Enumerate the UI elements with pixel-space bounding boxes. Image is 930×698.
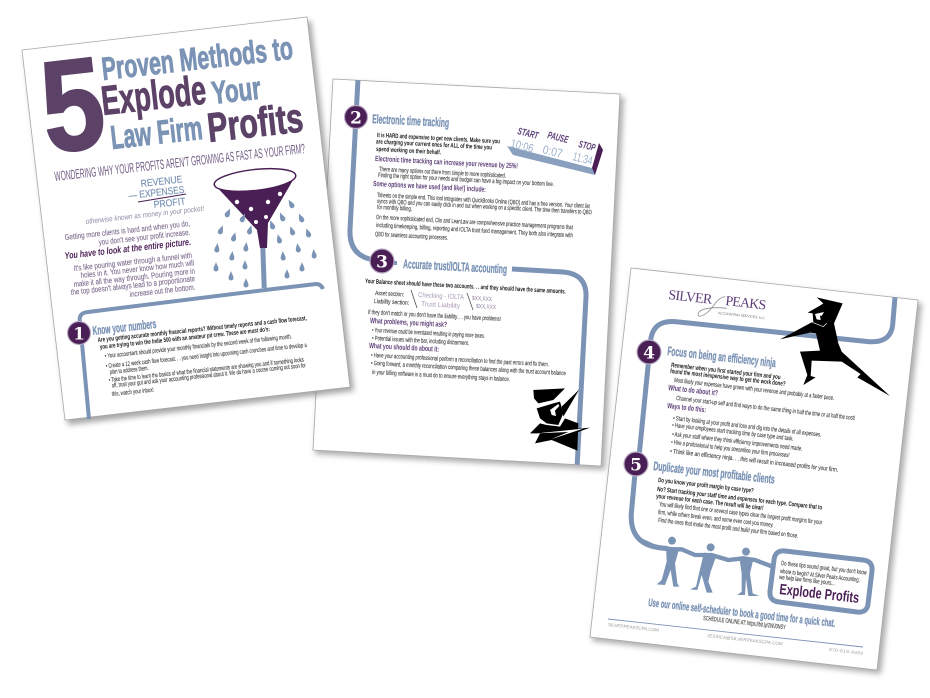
text block: intro: the top doesn't always lead to a proportionate xyxy=(70,274,196,297)
text block: duplicate clients: No? Start tracking your staff time and expenses for each type. Compare that to xyxy=(657,486,823,511)
logo: Silver Peaks: SILVER xyxy=(668,288,714,308)
callout: explode profits box: we help law firms like yours... xyxy=(778,574,835,587)
text block: efficiency: Ways to do this: xyxy=(667,401,707,414)
text block: efficiency: • Ask your staff where they think efficiency improvements need made. xyxy=(672,431,803,453)
text block: trust accounting: What problems, you might ask? xyxy=(370,316,448,329)
callout: explode profits box xyxy=(770,551,872,612)
timer graphic: START xyxy=(516,126,540,142)
heading: duplicate clients: Duplicate your most profitable clients xyxy=(653,459,775,487)
connector dash xyxy=(392,261,397,265)
page 1: cover with title and funnel: WONDERING WHY YOUR PROFITS AREN'T GROWING AS FAST AS YOUR FIRM? xyxy=(54,141,306,184)
timer graphic: 0:07 xyxy=(541,142,564,161)
text block: efficiency: Remember when you first started your firm and you xyxy=(671,362,781,381)
text block: know your numbers: this, watch your inbox! xyxy=(111,387,154,398)
title: Profits xyxy=(205,95,305,151)
text block: time tracking: There are many options out there from simple to more sophisticated. xyxy=(379,166,506,180)
pipe: right side of page 2 xyxy=(512,269,586,468)
text block: time tracking: Some options we have used (and like!) include: xyxy=(373,179,486,194)
text block: know your numbers: • Take the time to learn the basics of what the financial statements are showing you and if something looks xyxy=(108,357,304,384)
text block: trust accounting: Checking - IOLTA xyxy=(418,292,464,301)
text block: efficiency: • Start by looking at your profit and loss and dig into the details of all expenses. xyxy=(673,415,822,439)
text block: trust accounting: $XX,XXX xyxy=(476,304,496,311)
text block: know your numbers: off, trust your gut and ask your accounting professional about it. We do have a course coming out soon for xyxy=(111,362,306,389)
text block: trust accounting: • Potential issues with the bar, including disbarment. xyxy=(372,335,469,347)
text block: trust accounting: Liability section: xyxy=(374,298,409,307)
heading: accurate trust accounting: Accurate trust/IOLTA accounting xyxy=(403,257,507,276)
page 2: time tracking and trust accounting xyxy=(313,79,624,470)
footer contact line: JESSICA@SILVERPEAKSCPA.COM xyxy=(707,633,783,646)
text block: intro: You have to look at the entire picture. xyxy=(64,237,192,262)
badge 1: 1 xyxy=(73,324,85,344)
heading: efficiency ninja: Focus on being an efficiency ninja xyxy=(667,344,777,370)
text block: time tracking: QBO for seamless accounting processes. xyxy=(375,231,448,242)
text block: intro: holes in it. You never know how much will xyxy=(80,258,195,280)
badge 4: 4 xyxy=(643,344,655,364)
badge 5: 5 xyxy=(630,456,642,476)
timer graphic: 11:34 xyxy=(571,149,594,168)
text block: know your numbers: you are trying to win the Indie 500 with an amateur pit crew. These are must do's: xyxy=(99,326,270,351)
logo: Silver Peaks: PEAKS xyxy=(725,294,767,314)
text block: intro: It's like pouring water through a funnel with xyxy=(73,251,192,273)
title: 5 xyxy=(33,29,112,181)
footer contact line: 970-618-9468 xyxy=(829,647,864,656)
pipe: left side of page 2 xyxy=(350,79,374,260)
text block: time tracking: for monthly billing. xyxy=(377,204,412,213)
equation: revenue minus expenses: — EXPENSES xyxy=(128,185,185,202)
text block: trust accounting: in your billing software is a must do to ensure everything stays in balance. xyxy=(372,369,510,383)
equation: revenue minus expenses: PROFIT xyxy=(153,196,186,211)
callout: explode profits box: Do these tips sound great, but you don't know xyxy=(781,560,867,577)
text block: trust accounting: • Have your accounting professional perform a reconciliation to find the past errors and fix them. xyxy=(371,352,549,368)
text block: intro: make it all the way through. Pouring more in xyxy=(73,266,195,289)
equation: revenue minus expenses xyxy=(85,174,205,226)
icon: linked people xyxy=(640,537,773,596)
text block: efficiency: • Think like an efficiency ninja. . . this will result in increased profits for your firm. xyxy=(670,448,839,474)
callout: explode profits box: Explode Profits xyxy=(779,581,860,607)
text block: trust accounting: $XX,XXX xyxy=(472,296,492,303)
heading: know your numbers: Know your numbers xyxy=(92,317,157,338)
badge 3: 3 xyxy=(376,252,388,272)
footer contact line: SILVERPEAKSCPA.COM xyxy=(608,622,659,633)
text block: time tracking: including timekeeping, billing, reporting and IOLTA trust fund management. They both also integrate with xyxy=(376,222,573,239)
badge 4 xyxy=(637,340,661,364)
text block: time tracking: spend working on their behalf. xyxy=(376,146,441,156)
heading: electronic time tracking: Electronic time tracking xyxy=(372,112,449,130)
text block: know your numbers: Are you getting accurate monthly financial reports? Without timely reports and a cash flow forecast, xyxy=(97,315,307,344)
text block: trust accounting xyxy=(365,278,566,383)
badge 2: 2 xyxy=(350,108,362,128)
text block: duplicate clients: Do you know your profit margin by case type? xyxy=(658,477,754,495)
text block: duplicate clients: firm, while others break even, and some even cost you money. xyxy=(658,509,774,529)
timer graphic xyxy=(507,126,603,175)
text block: trust accounting: If they don't match or you don't have the liability. . . you have problems! xyxy=(368,309,501,323)
equation: revenue minus expenses: otherwise known as money in your pocket! xyxy=(85,204,205,226)
text block: know your numbers: plan to address them. xyxy=(109,365,149,376)
text block: duplicate clients: Find the ones that make the most profit and build your firm based on those. xyxy=(658,517,799,540)
footer contact line xyxy=(608,619,864,656)
text block: time tracking: Finding the right option for your needs and budget can have a big impact on your bottom line. xyxy=(378,172,554,188)
title xyxy=(33,29,305,181)
text block: time tracking: are charging your current ones for ALL of the time you xyxy=(376,139,492,152)
text block: intro: Getting more clients is hard and when you do, xyxy=(64,219,190,242)
icon: crouching ninja xyxy=(530,388,590,451)
timer graphic: 10:06 xyxy=(509,136,535,156)
pipe: page 1 flow line xyxy=(80,284,323,419)
text block: time tracking: Electronic time tracking can increase your revenue by 25%! xyxy=(375,154,518,170)
badge 2 xyxy=(344,106,368,128)
title: Law Firm xyxy=(109,109,204,156)
badge 5 xyxy=(624,452,648,476)
text block: trust accounting: Asset section: xyxy=(375,290,404,299)
text block: time tracking: On the more sophisticated end, Clio and LeanLaw are comprehensive practice management programs that xyxy=(376,214,573,231)
text block: know your numbers: • Your accountant should provide your monthly financials by the second week of the following month. xyxy=(104,333,292,360)
logo: Silver Peaks xyxy=(668,288,767,320)
equation: revenue minus expenses: REVENUE xyxy=(140,174,183,190)
badge 3 xyxy=(370,249,394,273)
logo: Silver Peaks: ACCOUNTING SERVICES, LLC xyxy=(718,311,766,320)
text block: efficiency: • Hire a professional to help you streamline your firm processes! xyxy=(671,439,790,459)
call to action: SCHEDULE ONLINE AT: https://bit.ly/2WJ0NSY xyxy=(703,615,787,631)
text block: efficiency: What to do about it? xyxy=(668,383,719,398)
text block: know your numbers: • Create a 12 week cash flow forecast. . . you need insight into upcoming cash crunches and time to develop a xyxy=(105,342,307,370)
text block: efficiency xyxy=(667,362,856,474)
text block: efficiency: Most likely your expenses have grown with your revenue and probably at a faster pace. xyxy=(674,377,835,402)
timer graphic: PAUSE xyxy=(546,130,570,146)
text block: efficiency: found the most inexpensive way to get the work done? xyxy=(670,368,786,388)
text block: duplicate clients: your revenue for each case. The result will be clear! xyxy=(656,493,764,512)
text block: trust accounting: Trust Liability xyxy=(421,301,461,310)
text block: efficiency: • Have your employees start tracking time by case type and task. xyxy=(672,422,794,443)
text block: time tracking: Tsheets on the simple end. This tool integrates with QuickBooks Online (QBO) and has a free version. Your client list xyxy=(377,192,590,210)
text block: trust accounting: • Your revenue could be overstated resulting in paying more taxes. xyxy=(372,327,485,340)
badge 1 xyxy=(68,322,90,344)
page 3: efficiency and profitable clients xyxy=(590,268,922,674)
icon: leaking funnel xyxy=(213,165,317,288)
page 1: cover with title and funnel xyxy=(22,17,354,425)
text block: intro: increase out the bottom. xyxy=(129,283,196,299)
pipe: page 3 lower xyxy=(631,473,667,548)
text block: trust accounting: What you should do about it: xyxy=(369,341,439,354)
text block: time tracking: syncs with QBO and you can easily click in and out when working on a specific client. The time then transfers to QBO xyxy=(377,198,592,216)
text block: trust accounting: Your Balance sheet should have these two accounts. . . and they should have the same amounts. xyxy=(365,278,566,296)
callout: explode profits box: where to begin? At Silver Peaks Accounting, xyxy=(779,568,860,584)
icon: leaping ninja xyxy=(780,297,890,396)
timer graphic: STOP xyxy=(577,139,597,154)
title: Explode xyxy=(99,67,208,124)
title: Proven Methods to xyxy=(100,30,295,87)
text block: time tracking xyxy=(373,132,592,242)
title: Your xyxy=(210,70,262,111)
text block: trust accounting: • Going forward, a monthly reconciliation comparing these balances along with the trust account balance xyxy=(371,360,566,377)
text block: duplicate clients xyxy=(656,477,823,540)
text block: know your numbers xyxy=(97,315,307,398)
text block: intro: you don't see your profit increase. xyxy=(98,228,191,247)
call to action xyxy=(648,597,836,631)
pipe: page 3 upper xyxy=(637,297,895,473)
text block: duplicate clients: You will likely find that one or several case types clear the largest profit margins for your xyxy=(659,501,823,526)
text block: time tracking: It is HARD and expensive to get new clients. Make sure you xyxy=(377,132,500,145)
text block: intro xyxy=(64,219,196,299)
